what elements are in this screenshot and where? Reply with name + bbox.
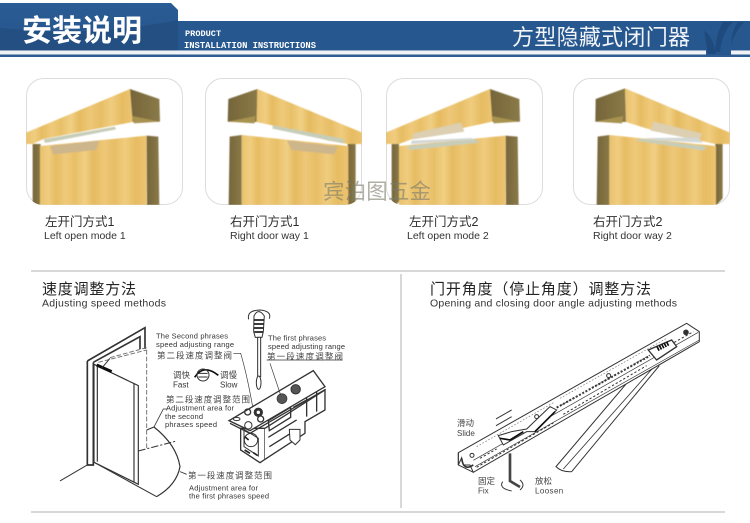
door closer arm: [407, 139, 480, 150]
heading: door angle adjusting methods: 门开角度（停止角度）调整方法: [430, 281, 651, 298]
panel: left open mode 1: [26, 78, 183, 205]
labels: speed adjustment callouts: 调慢: [220, 370, 238, 380]
subheading: product installation instructions: PRODUCT: [185, 29, 221, 39]
caption: left open mode 1: [44, 214, 126, 242]
labels: slide, fix, loosen: 放松: [535, 476, 553, 486]
door closer arm: [635, 139, 707, 151]
labels: speed adjustment callouts: 第二段速度调整范围: [166, 394, 250, 404]
labels: speed adjustment callouts: the second: [165, 412, 203, 421]
labels: speed adjustment callouts: 调快: [173, 370, 191, 380]
diagram: slide rail and arm: [458, 323, 699, 491]
labels: slide, fix, loosen: Loosen: [535, 486, 564, 496]
caption: left open mode 2: 左开门方式2: [409, 214, 479, 229]
labels: speed adjustment callouts: Adjustment area for: [166, 404, 234, 412]
heading: adjusting speed methods: 速度调整方法: [42, 281, 136, 298]
icon: closer body: [229, 371, 326, 463]
heading: install guide: 安装说明: [22, 15, 142, 48]
labels: slide, fix, loosen: 滑动: [457, 418, 475, 428]
labels: speed adjustment callouts: The Second phrases: [156, 332, 228, 340]
icon: sliding bracket: [498, 407, 557, 445]
labels: speed adjustment callouts: [156, 332, 345, 500]
panel: left open mode 2: [386, 78, 542, 205]
caption: left open mode 1: 左开门方式1: [45, 214, 115, 229]
labels: slide, fix, loosen: Fix: [478, 486, 489, 496]
labels: speed adjustment callouts: the first phrases speed: [189, 492, 269, 500]
product name: 方型隐藏式闭门器: [512, 25, 690, 50]
labels: speed adjustment callouts: Fast: [173, 380, 189, 390]
labels: slide, fix, loosen: Slide: [457, 429, 475, 438]
heading: adjusting speed methods: Adjusting speed methods: [42, 298, 166, 310]
labels: speed adjustment callouts: The first phrases: [268, 334, 326, 342]
subheading: product installation instructions: [184, 29, 316, 51]
door closer body: [50, 141, 99, 154]
labels: slide, fix, loosen: [457, 418, 564, 496]
door closer arm: [43, 127, 116, 143]
labels: speed adjustment callouts: Slow: [220, 380, 238, 390]
labels: speed adjustment callouts: speed adjusting range: [156, 340, 234, 349]
icon: screwdriver: [248, 310, 270, 389]
labels: speed adjustment callouts: phrases speed: [165, 420, 217, 429]
heading: door angle adjusting methods: Opening and closing door angle adjusting methods: [430, 298, 677, 310]
caption: left open mode 2: [407, 214, 489, 242]
caption: right door way 1: Right door way 1: [230, 230, 309, 242]
diagram: door with swing arcs: [60, 328, 187, 497]
subheading: product installation instructions: INSTALLATION INSTRUCTIONS: [184, 41, 316, 51]
header banner: [0, 3, 750, 57]
labels: speed adjustment callouts: speed adjusting range: [268, 342, 345, 351]
caption: right door way 2: [593, 214, 672, 242]
caption: right door way 2: Right door way 2: [593, 230, 672, 242]
door closer arm: [556, 366, 659, 472]
icon: leaf decoration: [704, 22, 744, 55]
icon: end block: [648, 340, 677, 360]
door closer body: [651, 122, 702, 141]
caption: left open mode 2: Left open mode 2: [407, 230, 489, 242]
caption: left open mode 1: Left open mode 1: [44, 230, 126, 242]
caption: right door way 1: [230, 214, 309, 242]
caption: right door way 1: 右开门方式1: [230, 214, 300, 229]
diagram: closer body and screwdriver: [195, 310, 343, 463]
icon: hex key: [510, 453, 520, 487]
labels: speed adjustment callouts: 第二段速度调整阀: [157, 350, 232, 360]
labels: speed adjustment callouts: 第一段速度调整阀: [267, 352, 343, 362]
door closer body: [287, 141, 338, 154]
door closer body: [412, 123, 464, 139]
labels: slide, fix, loosen: 固定: [478, 476, 496, 486]
labels: speed adjustment callouts: 第一段速度调整范围: [188, 470, 272, 480]
door closer arm: [272, 125, 344, 143]
panel: right door way 2: [574, 78, 730, 205]
labels: speed adjustment callouts: Adjustment area for: [189, 484, 258, 492]
heading: adjusting speed methods: [42, 281, 166, 310]
caption: right door way 2: 右开门方式2: [593, 214, 663, 229]
watermark: 宾泊图五金: [323, 180, 431, 204]
heading: door angle adjusting methods: [430, 281, 677, 310]
panel: right door way 1: [206, 78, 362, 205]
